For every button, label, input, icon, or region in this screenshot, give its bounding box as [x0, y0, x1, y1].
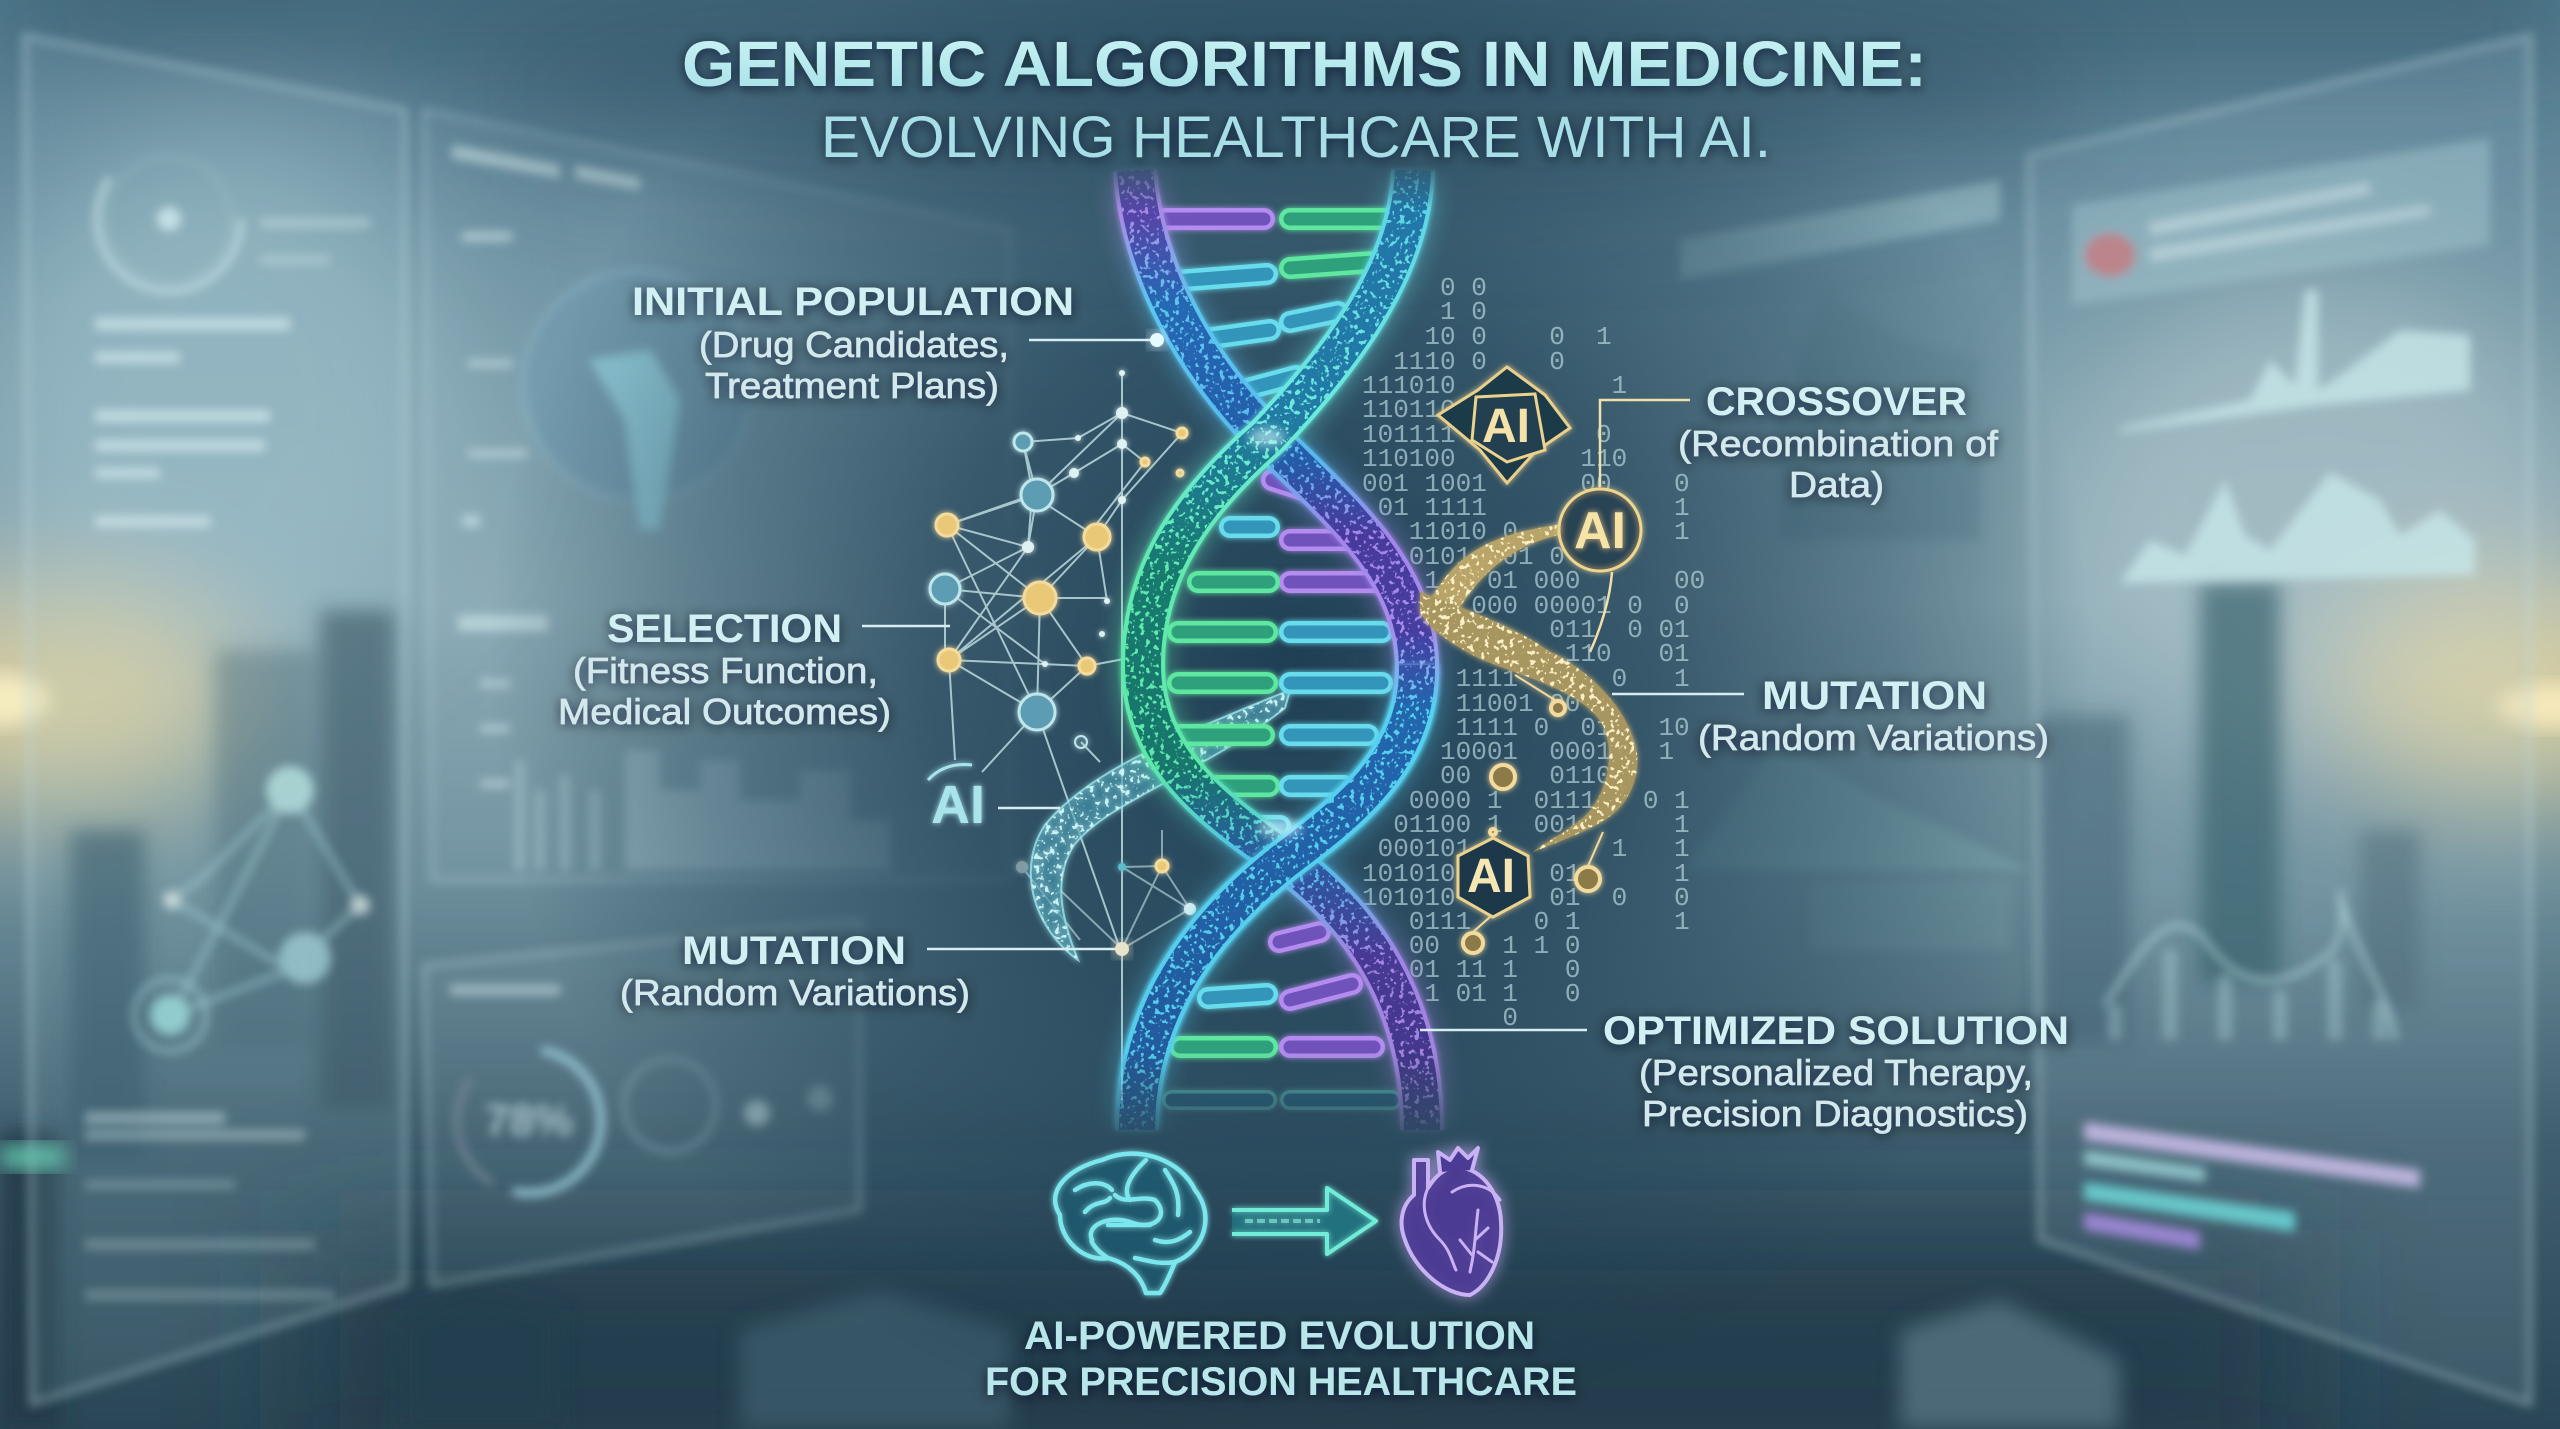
label: optimized solution: (Personalized Therapy,	[1639, 1052, 2033, 1093]
gauge	[431, 985, 833, 1219]
left AI badge: AI	[931, 775, 985, 835]
panel: medical data upper	[424, 110, 1010, 880]
title line 2: EVOLVING HEALTHCARE WITH AI.	[821, 105, 1771, 170]
blurred globe	[523, 270, 753, 530]
panel: right inner dashboard	[1680, 180, 2030, 950]
rungs	[1165, 219, 1392, 1100]
gold AI hexagon bottom	[1458, 838, 1530, 917]
ribbon: teal crossover strand	[1031, 690, 1290, 960]
gold branch to AI	[1432, 524, 1563, 610]
label: selection: Medical Outcomes)	[558, 691, 891, 732]
ribbon: gold crossover strands	[1420, 524, 1637, 852]
gold AI hexagon bottom: AI	[1467, 850, 1515, 903]
label: mutation right	[1698, 674, 2049, 758]
glow core left	[0, 674, 50, 726]
binary code column: 11010 0 1	[1362, 517, 1690, 547]
binary code column: 0 0	[1362, 273, 1487, 303]
footer line 2: FOR PRECISION HEALTHCARE	[985, 1360, 1577, 1404]
label: selection	[558, 607, 891, 732]
binary code column: 0000 1 0111 0 1	[1362, 786, 1690, 816]
panel: medical data lower	[424, 920, 860, 1285]
binary code column: 1110 0 0	[1362, 347, 1565, 377]
binary code column: 01 11 1 0	[1362, 955, 1580, 985]
leader: mutation left	[927, 948, 1116, 950]
label: mutation left: (Random Variations)	[620, 972, 970, 1013]
binary code column: 101010 01 0 0	[1362, 883, 1690, 913]
label: optimized solution	[1603, 1009, 2069, 1134]
gold AI circle	[1559, 489, 1641, 571]
leader: selection	[862, 625, 950, 627]
label: mutation left	[620, 929, 970, 1013]
binary code column: 01 1111 1	[1362, 493, 1690, 523]
small white nodes	[1016, 370, 1196, 915]
blurred bar chart	[515, 750, 890, 870]
leader: initial population	[1029, 339, 1150, 341]
binary code column: 1 01 000 00	[1362, 566, 1705, 596]
binary code column: 110100 110	[1362, 444, 1627, 474]
right panel coloured bars	[2084, 1122, 2420, 1250]
dot: mutation left	[1115, 942, 1129, 956]
binary code column: 10 0 0 1	[1362, 322, 1612, 352]
leader: crossover	[1600, 400, 1690, 487]
helix outer glow	[1135, 170, 1422, 1130]
gold AI hexagon top	[1438, 367, 1570, 483]
icon: brain	[1055, 1154, 1205, 1293]
leader lines	[862, 333, 1744, 1030]
footer caption	[985, 1314, 1577, 1404]
top band behind title	[460, 0, 2100, 200]
label: crossover: (Recombination of	[1678, 423, 1999, 464]
right panel line chart	[2105, 890, 2395, 1040]
gold nodes	[936, 428, 1187, 872]
label: optimized solution: Precision Diagnostics)	[1642, 1093, 2028, 1134]
right panel header	[2072, 138, 2490, 305]
icon: heart	[1402, 1148, 1501, 1295]
binary code column: 111010 1	[1362, 371, 1627, 401]
label: optimized solution: OPTIMIZED SOLUTION	[1603, 1009, 2069, 1053]
binary code column: 000101 1 1	[1362, 834, 1690, 864]
binary code column: 110110	[1362, 395, 1456, 425]
binary code column: 101010 01 1	[1362, 859, 1690, 889]
panel: right dashboard	[2029, 36, 2530, 1404]
binary code column: 10001 0001 1	[1362, 737, 1674, 767]
dark vignette behind helix	[490, 0, 2090, 1429]
label: mutation right: (Random Variations)	[1698, 717, 2049, 758]
gold main ribbon	[1420, 592, 1637, 852]
title	[682, 28, 1927, 170]
strand two	[1143, 170, 1422, 1130]
label: crossover	[1678, 380, 1999, 505]
dot: initial population	[1150, 333, 1164, 347]
binary code column: 1 0	[1362, 297, 1487, 327]
label: crossover: Data)	[1789, 464, 1884, 505]
title line 1: GENETIC ALGORITHMS IN MEDICINE:	[682, 28, 1927, 100]
binary code column: 001 1001 00 0	[1362, 469, 1690, 499]
strand one lower overlap	[1137, 665, 1417, 1130]
binary code column: 0	[1362, 1003, 1518, 1033]
label: initial population: Treatment Plans)	[705, 365, 999, 406]
label: selection: SELECTION	[607, 607, 842, 651]
left panel text bars	[85, 218, 370, 1300]
right panel area charts	[2120, 290, 2475, 583]
crossing highlights	[1249, 428, 1302, 837]
binary code column: 0111 0 1 1	[1362, 907, 1690, 937]
network edges	[945, 373, 1190, 1100]
leader: left AI	[998, 807, 1060, 809]
glow core right	[2496, 684, 2560, 728]
binary code column: 00 1 1 0	[1362, 931, 1580, 961]
gold AI hexagon top: AI	[1482, 400, 1530, 453]
strand one	[1135, 170, 1417, 1130]
blurred skyline	[0, 583, 2420, 1429]
binary code column: 000 00001 0 0	[1362, 591, 1690, 621]
leader: optimized solution	[1420, 1029, 1587, 1031]
dna helix	[1135, 170, 1422, 1130]
gold nodes right	[1463, 675, 1603, 953]
binary code column: 1 01 1 0	[1362, 979, 1580, 1009]
medical data heading bars	[452, 145, 640, 787]
label: initial population: (Drug Candidates,	[699, 324, 1009, 365]
label: selection: (Fitness Function,	[573, 650, 878, 691]
binary code column: 01100 1 001 1	[1362, 810, 1690, 840]
binary code column: 11001 00	[1362, 689, 1580, 719]
label: crossover: CROSSOVER	[1706, 380, 1967, 424]
label: mutation left: MUTATION	[682, 929, 906, 973]
label: mutation right: MUTATION	[1762, 674, 1987, 718]
left panel ring gauge	[97, 147, 241, 291]
teal nodes	[930, 433, 1055, 730]
footer line 1: AI-POWERED EVOLUTION	[1024, 1314, 1535, 1358]
binary code column	[1362, 273, 1705, 1033]
binary code column: 1111 0 01 10	[1362, 713, 1690, 743]
label: initial population	[632, 280, 1074, 406]
left panel network	[134, 766, 370, 1051]
panel: left dashboard	[0, 36, 405, 1404]
binary code column: 011 0 01	[1362, 615, 1690, 645]
gauge: 78%	[485, 1096, 573, 1145]
thin line from AI circle	[1590, 572, 1612, 652]
binary code column: 110 01	[1362, 639, 1690, 669]
label: initial population: INITIAL POPULATION	[632, 280, 1074, 324]
binary code column: 1111 0 1	[1362, 664, 1690, 694]
binary code column: 00 0110	[1362, 761, 1612, 791]
labels	[558, 280, 2069, 1134]
binary code column: 101111 0	[1362, 420, 1612, 450]
leader: mutation right	[1612, 693, 1744, 695]
horizontal glow lines	[880, 1218, 1690, 1222]
binary code column: 0101 01 0	[1362, 542, 1565, 572]
gold AI circle: AI	[1574, 502, 1626, 560]
network graph	[930, 370, 1196, 1100]
arrow	[1232, 1188, 1376, 1254]
